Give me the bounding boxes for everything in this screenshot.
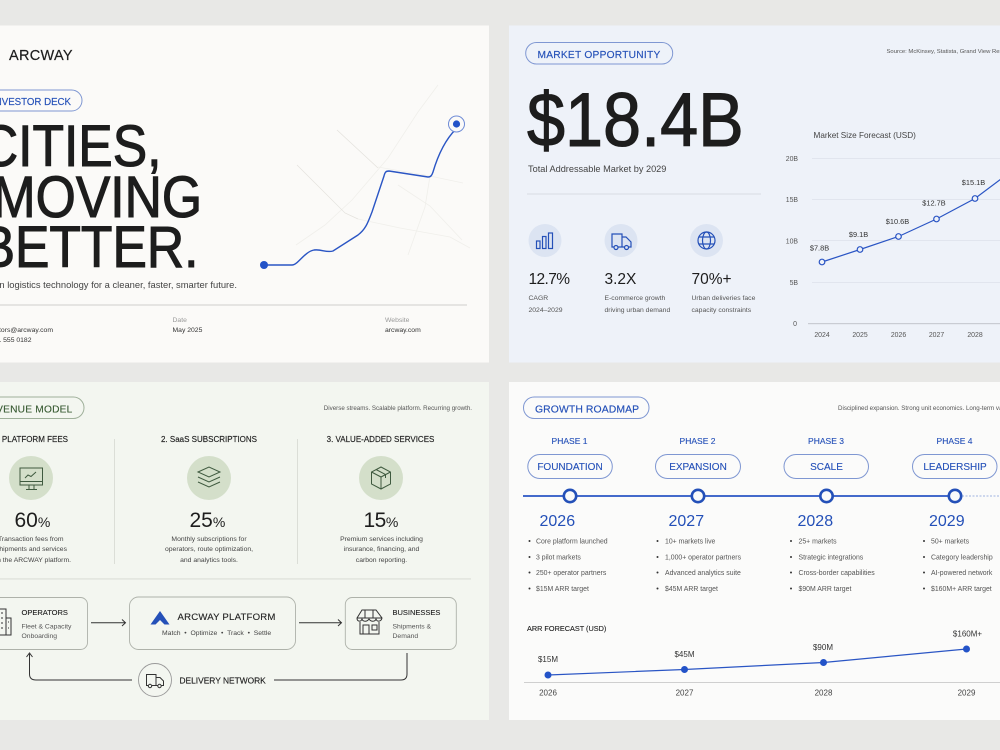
badge: revenue model — [0, 397, 84, 418]
data labels: $7.8B — [810, 244, 829, 252]
stat: e-commerce: driving urban demand — [604, 307, 670, 314]
badge: investor deck — [0, 90, 82, 111]
panel: revenue model — [0, 382, 489, 720]
stat: CAGR: 2024–2029 — [528, 307, 563, 314]
flow: operators: OPERATORS — [22, 608, 68, 617]
arrow: operators to platform — [91, 620, 126, 626]
ARR forecast chart: 2028 — [815, 688, 833, 698]
icon: truck — [612, 234, 631, 250]
ARR forecast chart: 2026 — [539, 688, 557, 698]
x axis labels: 2028 — [967, 332, 983, 339]
stat: CAGR: 12.7% — [528, 271, 570, 288]
stream 3: value-added services: 3. VALUE-ADDED SERVICES — [327, 435, 434, 444]
y axis labels: 15B — [786, 197, 798, 204]
icon: monitor — [20, 468, 42, 490]
stat: urban deliveries — [690, 224, 756, 314]
stat: e-commerce — [604, 224, 670, 314]
route line — [264, 129, 456, 265]
phase 2: PHASE 2 — [680, 436, 716, 446]
route map — [260, 85, 470, 269]
phase 1: $15M ARR target — [536, 586, 589, 593]
y axis labels: 0 — [793, 321, 797, 328]
stream 2: SaaS subscriptions: and analytics tools. — [180, 557, 238, 564]
timeline — [523, 490, 1000, 502]
phase 3: Cross-border capabilities — [798, 570, 875, 577]
contact details — [0, 327, 53, 344]
icon: delivery truck — [146, 674, 164, 688]
website: arcway.com — [385, 327, 421, 334]
badge: growth roadmap — [524, 397, 649, 418]
data labels: $10.6B — [886, 217, 909, 226]
flow: ARCWAY platform: Match • Optimize • Track • Settle — [162, 630, 271, 637]
phase 4 — [912, 436, 997, 593]
tagline: Diverse streams. Scalable platform. Recurring growth. — [324, 405, 472, 412]
arrow: return to operators — [26, 653, 132, 680]
icon: layers — [198, 467, 220, 487]
x axis labels: 2027 — [929, 332, 944, 339]
title — [0, 113, 202, 280]
stat: urban deliveries: capacity constraints — [692, 307, 752, 314]
phase 2: EXPANSION — [669, 462, 727, 473]
series line — [822, 170, 1000, 262]
date — [172, 317, 203, 334]
big number: $18.4B — [527, 79, 744, 163]
delivery network — [138, 664, 266, 696]
stat: CAGR: CAGR — [528, 295, 548, 302]
flow: operators: Fleet & Capacity — [22, 624, 72, 630]
ARR forecast chart: $90M — [813, 643, 833, 652]
delivery network: DELIVERY NETWORK — [180, 676, 266, 686]
phase 3: SCALE — [810, 462, 843, 473]
stat: e-commerce: 3.2X — [604, 271, 637, 288]
stream 3: value-added services — [327, 435, 434, 564]
ARR forecast chart: 2029 — [958, 688, 976, 698]
data labels — [810, 147, 1000, 252]
badge: market opportunity — [526, 42, 673, 64]
phase 1: FOUNDATION — [537, 462, 603, 473]
phase 1: 250+ operator partners — [536, 570, 607, 577]
data labels: $12.7B — [922, 198, 946, 208]
phase 2: $45M ARR target — [665, 586, 718, 593]
icon: platform logo — [150, 611, 170, 624]
phase 4: Category leadership — [931, 554, 993, 562]
phase 3: 2028 — [798, 513, 833, 530]
stream 3: value-added services: 15% — [364, 509, 398, 532]
stream 3: value-added services: carbon reporting. — [356, 557, 407, 564]
date: Date — [172, 317, 187, 324]
flow: ARCWAY platform: ARCWAY PLATFORM — [178, 612, 276, 623]
phase 4: PHASE 4 — [937, 436, 973, 446]
phase 2: Advanced analytics suite — [665, 570, 741, 577]
stream 2: SaaS subscriptions: 25% — [190, 509, 225, 532]
panel: growth roadmap — [509, 382, 1000, 720]
divider — [0, 304, 467, 306]
icon: bars — [536, 233, 552, 248]
stream 3: value-added services: Premium services including — [340, 536, 423, 543]
y axis labels — [786, 156, 798, 328]
flow: businesses: Demand — [392, 633, 418, 640]
x axis labels: 2024 — [814, 332, 830, 339]
y axis labels: 5B — [790, 280, 798, 287]
arrow: businesses to delivery network — [274, 653, 407, 680]
phase 1: Core platform launched — [536, 538, 608, 546]
flow: operators: Onboarding — [22, 633, 57, 640]
panel: cover — [0, 26, 489, 362]
x axis labels: 2026 — [891, 332, 906, 339]
stat: CAGR — [528, 224, 570, 314]
y axis labels: 10B — [786, 238, 798, 246]
phase 1: 3 pilot markets — [536, 554, 581, 562]
data points — [819, 196, 978, 265]
date: May 2025 — [172, 327, 203, 334]
ARR forecast chart: $160M+ — [953, 630, 982, 638]
ARR forecast chart: $15M — [538, 655, 558, 664]
stream 2: SaaS subscriptions: Monthly subscriptions for — [171, 536, 247, 543]
stat: e-commerce: E-commerce growth — [604, 295, 666, 302]
phase 4: $160M+ ARR target — [931, 586, 992, 593]
phase 3: Strategic integrations — [798, 554, 864, 562]
phase 3: 25+ markets — [798, 538, 837, 546]
y axis labels: 20B — [786, 156, 798, 163]
phase 1 — [528, 436, 612, 593]
flow: businesses — [345, 598, 456, 650]
phase 4: LEADERSHIP — [923, 462, 987, 473]
ARR forecast chart — [524, 624, 1000, 698]
icon: building — [0, 609, 11, 635]
phase 1: 2026 — [540, 513, 575, 530]
arrow: platform to businesses — [299, 620, 342, 626]
x axis labels: 2025 — [852, 332, 868, 339]
phase 4: 50+ markets — [931, 538, 970, 546]
flow: businesses: Shipments & — [392, 624, 432, 630]
website — [385, 317, 421, 334]
stat: urban deliveries: Urban deliveries face — [692, 295, 756, 302]
badge: market opportunity: MARKET OPPORTUNITY — [538, 50, 660, 61]
phase 3: PHASE 3 — [808, 436, 844, 446]
website: Website — [385, 317, 410, 324]
data labels: $15.1B — [962, 178, 985, 187]
stat: urban deliveries: 70%+ — [692, 271, 732, 288]
flow: ARCWAY platform — [130, 597, 296, 650]
origin marker — [260, 261, 268, 269]
stream 3: value-added services: insurance, financing, and — [344, 546, 420, 553]
phase 4: 2029 — [929, 513, 965, 530]
phase 1: PHASE 1 — [552, 436, 588, 446]
phase 2: 2027 — [668, 513, 704, 530]
phase 3 — [784, 436, 875, 593]
ARR forecast chart: $45M — [674, 650, 695, 659]
ARR forecast chart: ARR FORECAST (USD) — [527, 624, 606, 633]
phase 4: AI-powered network — [931, 570, 993, 577]
data labels: $9.1B — [849, 230, 868, 239]
logo wordmark: ARCWAY — [9, 48, 73, 64]
phase 3: $90M ARR target — [798, 586, 851, 593]
destination marker — [448, 116, 464, 132]
panel: market opportunity — [509, 26, 1000, 362]
x axis labels — [814, 332, 1000, 339]
stream 1: platform fees — [0, 435, 71, 564]
flow: operators — [0, 598, 88, 650]
stream 2: SaaS subscriptions — [161, 435, 257, 564]
badge: growth roadmap: GROWTH ROADMAP — [535, 404, 639, 416]
line chart: market size forecast — [786, 131, 1000, 339]
stream 1: platform fees: 60% — [14, 509, 50, 532]
icon: storefront — [357, 610, 382, 634]
icon: box — [372, 467, 390, 489]
icon: globe — [698, 232, 715, 249]
flow: businesses: BUSINESSES — [392, 608, 440, 617]
ARR forecast chart: 2027 — [676, 688, 694, 698]
chart title: Market Size Forecast (USD) — [814, 131, 916, 140]
big number caption: Total Addressable Market by 2029 — [528, 164, 666, 174]
phase 2: 1,000+ operator partners — [665, 554, 742, 562]
stream 2: SaaS subscriptions: 2. SaaS SUBSCRIPTIONS — [161, 435, 257, 444]
phase 2 — [656, 436, 742, 593]
phase 2: 10+ markets live — [665, 538, 716, 546]
stream 2: SaaS subscriptions: operators, route optimization, — [165, 546, 253, 553]
